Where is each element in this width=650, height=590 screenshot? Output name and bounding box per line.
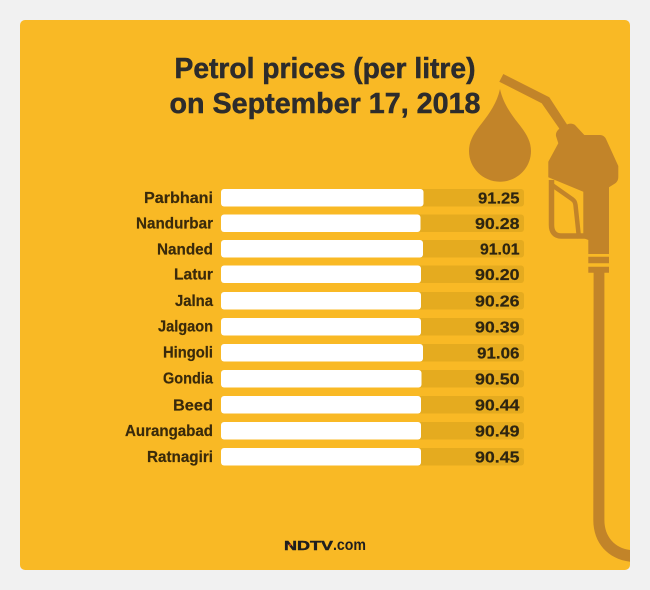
title: Petrol prices (per litre) (174, 53, 476, 85)
row: Ratnagiri: 90.45 (475, 450, 520, 466)
row: Nandurbar (136, 214, 524, 233)
row: Ratnagiri: Ratnagiri (147, 449, 213, 466)
row: Aurangabad: 90.49 (475, 424, 520, 440)
logo: NDTV.com: .com (333, 537, 366, 554)
row: Hingoli (163, 344, 524, 362)
row: Ratnagiri (147, 448, 524, 466)
title (170, 53, 480, 120)
row: Nandurbar: 90.28 (475, 216, 520, 233)
row: Jalgaon: 90.39 (475, 320, 520, 336)
row: Parbhani: 91.25 (478, 190, 520, 208)
row: Gondia: 90.50 (475, 372, 520, 388)
row: Parbhani (144, 189, 524, 208)
row: Jalna: 90.26 (475, 294, 520, 310)
row: Aurangabad: Aurangabad (125, 423, 213, 440)
row: Latur: 90.20 (475, 267, 520, 284)
row: Nanded (157, 240, 524, 258)
row: Beed: 90.44 (475, 398, 520, 414)
row: Hingoli: 91.06 (477, 346, 520, 362)
bar chart: petrol prices by district (125, 189, 524, 466)
row: Parbhani: Parbhani (144, 190, 213, 207)
row: Nandurbar: Nandurbar (136, 216, 213, 232)
row: Jalgaon (158, 318, 524, 336)
icon: fuel drop (469, 89, 531, 182)
row: Jalna: Jalna (175, 293, 213, 310)
icon: fuel nozzle and hose (499, 74, 630, 562)
row: Gondia (163, 370, 524, 388)
row: Nanded: Nanded (157, 242, 213, 258)
logo: NDTV.com: NDTV (284, 539, 334, 553)
row: Jalgaon: Jalgaon (158, 318, 213, 336)
row: Beed: Beed (173, 398, 213, 414)
row: Nanded: 91.01 (480, 242, 520, 258)
row: Aurangabad (125, 422, 524, 440)
row: Latur: Latur (174, 266, 213, 284)
row: Beed (173, 396, 524, 414)
row: Jalna (175, 292, 524, 310)
row: Hingoli: Hingoli (163, 344, 213, 362)
row: Gondia: Gondia (163, 370, 213, 388)
logo: NDTV.com (284, 537, 366, 554)
title: on September 17, 2018 (170, 88, 480, 120)
row: Latur (174, 266, 524, 284)
